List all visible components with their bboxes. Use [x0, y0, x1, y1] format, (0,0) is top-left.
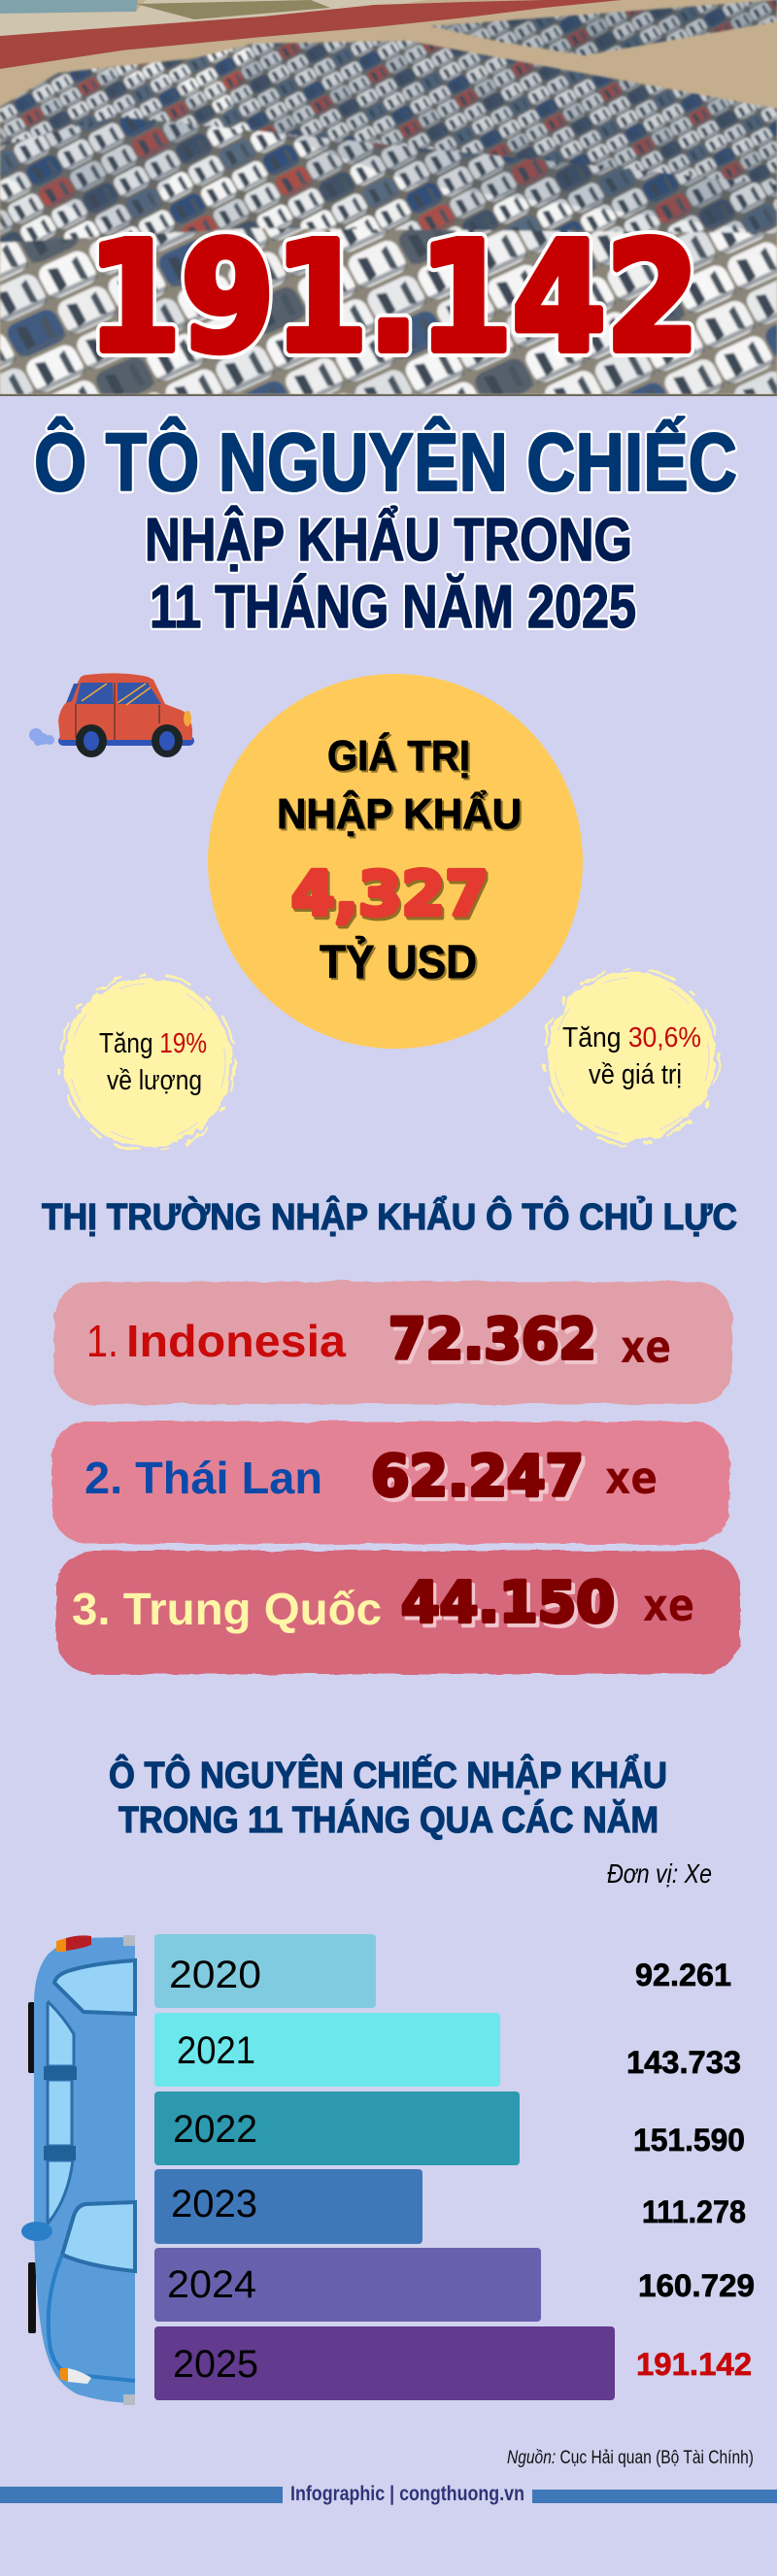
panel: Thai Lan [51, 1422, 729, 1544]
panel: Thai Lan: 2. Thái Lan [84, 1453, 322, 1503]
panel: Trung Quoc: 44.150 [401, 1569, 615, 1635]
bar 2022: 151.590 [633, 2123, 745, 2158]
heading: yearly chart [109, 1753, 667, 1841]
panel: Indonesia: Indonesia [126, 1316, 346, 1366]
callout: volume growth: Tăng 19% [99, 1028, 207, 1059]
icon: blue car seen from above [21, 1935, 135, 2405]
bar 2021: 2021 [177, 2029, 255, 2072]
panel: Trung Quoc: 3. Trung Quốc [72, 1584, 382, 1634]
bar 2025: 2025 [173, 2343, 258, 2386]
panel: Thai Lan: xe [605, 1452, 658, 1504]
bar 2023: 2023 [171, 2183, 257, 2225]
value: 4,327: 4,327 [293, 861, 490, 932]
heading: yearly chart: Ô TÔ NGUYÊN CHIẾC NHẬP KHẨU [109, 1753, 667, 1796]
unit note: Đơn vị: Xe [607, 1858, 712, 1889]
panel: Indonesia: 72.362 [391, 1310, 600, 1376]
bar 2023 [154, 2169, 746, 2244]
panel: Trung Quoc [56, 1551, 740, 1674]
panel: Trung Quoc: xe [643, 1579, 694, 1631]
header photo: cars in port yard [0, 0, 777, 396]
title line 3: 11 THÁNG NĂM 2025 [150, 574, 636, 641]
panel: Indonesia [54, 1282, 732, 1404]
bar 2020: 2020 [169, 1954, 261, 1996]
bar 2024: 2024 [167, 2263, 256, 2306]
panel: Indonesia: xe [621, 1321, 671, 1373]
big number 191.142: 191.142 [87, 210, 699, 385]
panel: Thai Lan: 62.247 [374, 1447, 588, 1513]
title line 2: NHẬP KHẨU TRONG [145, 507, 632, 574]
bar 2024 [154, 2248, 755, 2322]
callout: value growth: Tăng 30,6% [562, 1022, 701, 1054]
big number 191.142: 191.142 [87, 210, 699, 385]
bar 2022 [154, 2091, 745, 2165]
panel: Indonesia: 72.362 [388, 1306, 596, 1372]
title [34, 417, 737, 641]
unit: TY USD: TỶ USD [321, 937, 479, 990]
label: NHAP KHAU: NHẬP KHẨU [279, 790, 524, 840]
value: 4,327: 4,327 [291, 858, 489, 929]
icon: red car with exhaust smoke [29, 673, 194, 757]
bar 2020 [154, 1934, 731, 2008]
bar 2025 [154, 2326, 752, 2400]
bar 2024: 160.729 [638, 2268, 755, 2303]
bar 2025: 191.142 [636, 2347, 752, 2382]
label: GIA TRI: GIÁ TRỊ [327, 731, 470, 780]
footer credit: Infographic | congthuong.vn [290, 2483, 524, 2505]
callout: volume growth [60, 974, 235, 1151]
title line 2: NHẬP KHẨU TRONG [145, 507, 632, 574]
bar 2021 [154, 2013, 741, 2087]
unit: TY USD: TỶ USD [320, 935, 477, 988]
panel: import value circle [208, 674, 583, 1049]
bar 2020: 92.261 [635, 1957, 731, 1992]
title line 3: 11 THÁNG NĂM 2025 [150, 574, 636, 641]
callout: value growth [544, 968, 719, 1145]
callout: value growth: về giá trị [589, 1059, 682, 1090]
bar 2023: 111.278 [642, 2194, 746, 2229]
label: GIA TRI: GIÁ TRỊ [329, 733, 472, 782]
heading: main markets: THỊ TRƯỜNG NHẬP KHẨU Ô TÔ CHỦ LỰC [42, 1194, 737, 1238]
footer credit [0, 2483, 777, 2505]
bar 2022: 2022 [173, 2108, 257, 2151]
callout: volume growth: về lượng [107, 1065, 202, 1096]
panel: Trung Quoc: 44.150 [404, 1573, 619, 1639]
label: NHAP KHAU: NHẬP KHẨU [277, 788, 522, 838]
bar 2021: 143.733 [626, 2045, 741, 2080]
bar chart: imports by year [154, 1934, 755, 2400]
panel: Thai Lan: 62.247 [371, 1443, 584, 1509]
panel: Indonesia: 1. [86, 1316, 118, 1366]
heading: yearly chart: TRONG 11 THÁNG QUA CÁC NĂM [118, 1798, 659, 1841]
